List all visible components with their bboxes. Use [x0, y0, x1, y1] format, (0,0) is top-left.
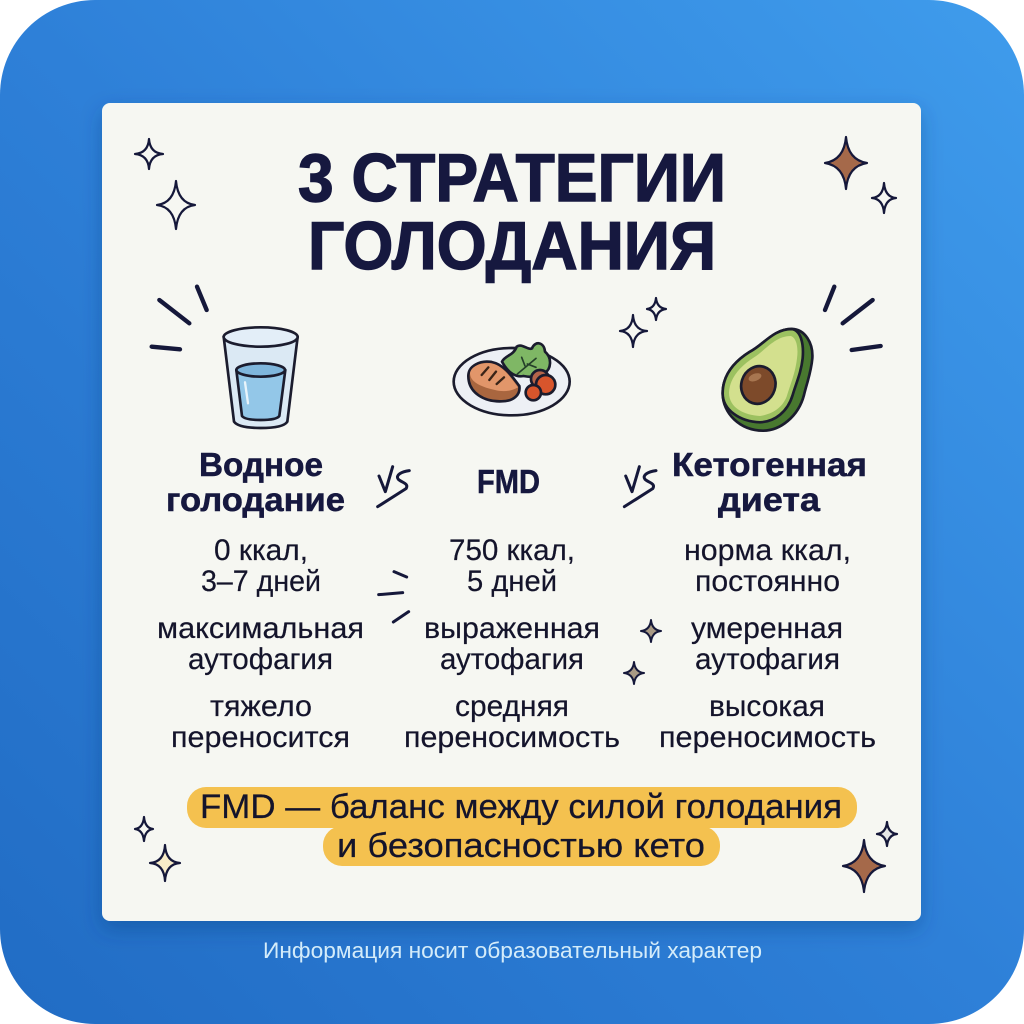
- callout: yellow highlighted conclusion: и безопасностью кето: [337, 827, 705, 865]
- text column: FMD: переносимость: [404, 721, 620, 754]
- title: 3 СТРАТЕГИИ: [298, 140, 726, 216]
- vs mark left: [378, 467, 409, 507]
- title: [298, 140, 726, 284]
- text column: FMD: выраженная: [424, 612, 600, 645]
- heading: keto diet: Кетогенная: [672, 446, 867, 483]
- heading: water fasting: голодание: [166, 481, 345, 518]
- text column: water fasting: 3–7 дней: [201, 565, 321, 598]
- text column: FMD: [404, 534, 620, 754]
- footer disclaimer: Информация носит образовательный характер: [263, 938, 762, 963]
- icon: sparkles top right: [825, 137, 896, 213]
- icon: sparkles top left: [135, 139, 195, 229]
- icon: plate with steak and salad: [454, 343, 570, 415]
- icon: sparkles bottom left: [135, 817, 180, 881]
- lettuce: [502, 343, 550, 377]
- icon: avocado: [723, 287, 881, 431]
- rays: [825, 287, 881, 350]
- heading: water fasting: [166, 446, 345, 518]
- heading: water fasting: Водное: [199, 446, 323, 483]
- text column: water fasting: переносится: [171, 721, 350, 754]
- icon: sparkles bottom right: [843, 822, 897, 892]
- icon: sparkles between columns: [624, 620, 661, 684]
- text column: FMD: аутофагия: [440, 643, 584, 676]
- text column: keto: [659, 534, 876, 754]
- skin: [723, 329, 812, 431]
- water: [236, 370, 285, 420]
- text column: keto: умеренная: [691, 612, 843, 645]
- glass rim: [224, 327, 298, 347]
- heading: keto diet: [672, 446, 867, 518]
- callout: yellow highlighted conclusion: FMD — баланс между силой голодания: [200, 788, 842, 826]
- text column: keto: переносимость: [659, 721, 876, 754]
- heading: keto diet: диета: [718, 481, 821, 518]
- text column: water fasting: 0 ккал,: [214, 534, 308, 567]
- text column: keto: высокая: [709, 690, 825, 723]
- title: ГОЛОДАНИЯ: [308, 208, 716, 284]
- text column: keto: норма ккал,: [684, 534, 851, 567]
- text column: water fasting: максимальная: [157, 612, 364, 645]
- icon: sparkles above avocado: [620, 298, 666, 347]
- steak: [468, 362, 519, 401]
- flesh: [723, 329, 803, 422]
- pit: [736, 362, 780, 408]
- text column: keto: аутофагия: [695, 643, 840, 676]
- icon: water glass: [152, 287, 298, 428]
- text column: water fasting: [157, 534, 364, 754]
- panel: main card: [102, 103, 921, 921]
- text column: FMD: средняя: [455, 690, 569, 723]
- text column: FMD: 5 дней: [467, 565, 557, 598]
- decorative rays between columns: [379, 572, 409, 622]
- tomatoes: [531, 370, 549, 388]
- text column: keto: постоянно: [695, 565, 840, 598]
- rays: [152, 287, 207, 349]
- callout: yellow highlighted conclusion: [187, 787, 857, 866]
- heading: FMD: FMD: [477, 463, 540, 500]
- glass body: [224, 337, 298, 428]
- vs mark right: [624, 467, 656, 507]
- text column: FMD: 750 ккал,: [449, 534, 575, 567]
- text column: water fasting: тяжело: [210, 690, 312, 723]
- text column: water fasting: аутофагия: [188, 643, 333, 676]
